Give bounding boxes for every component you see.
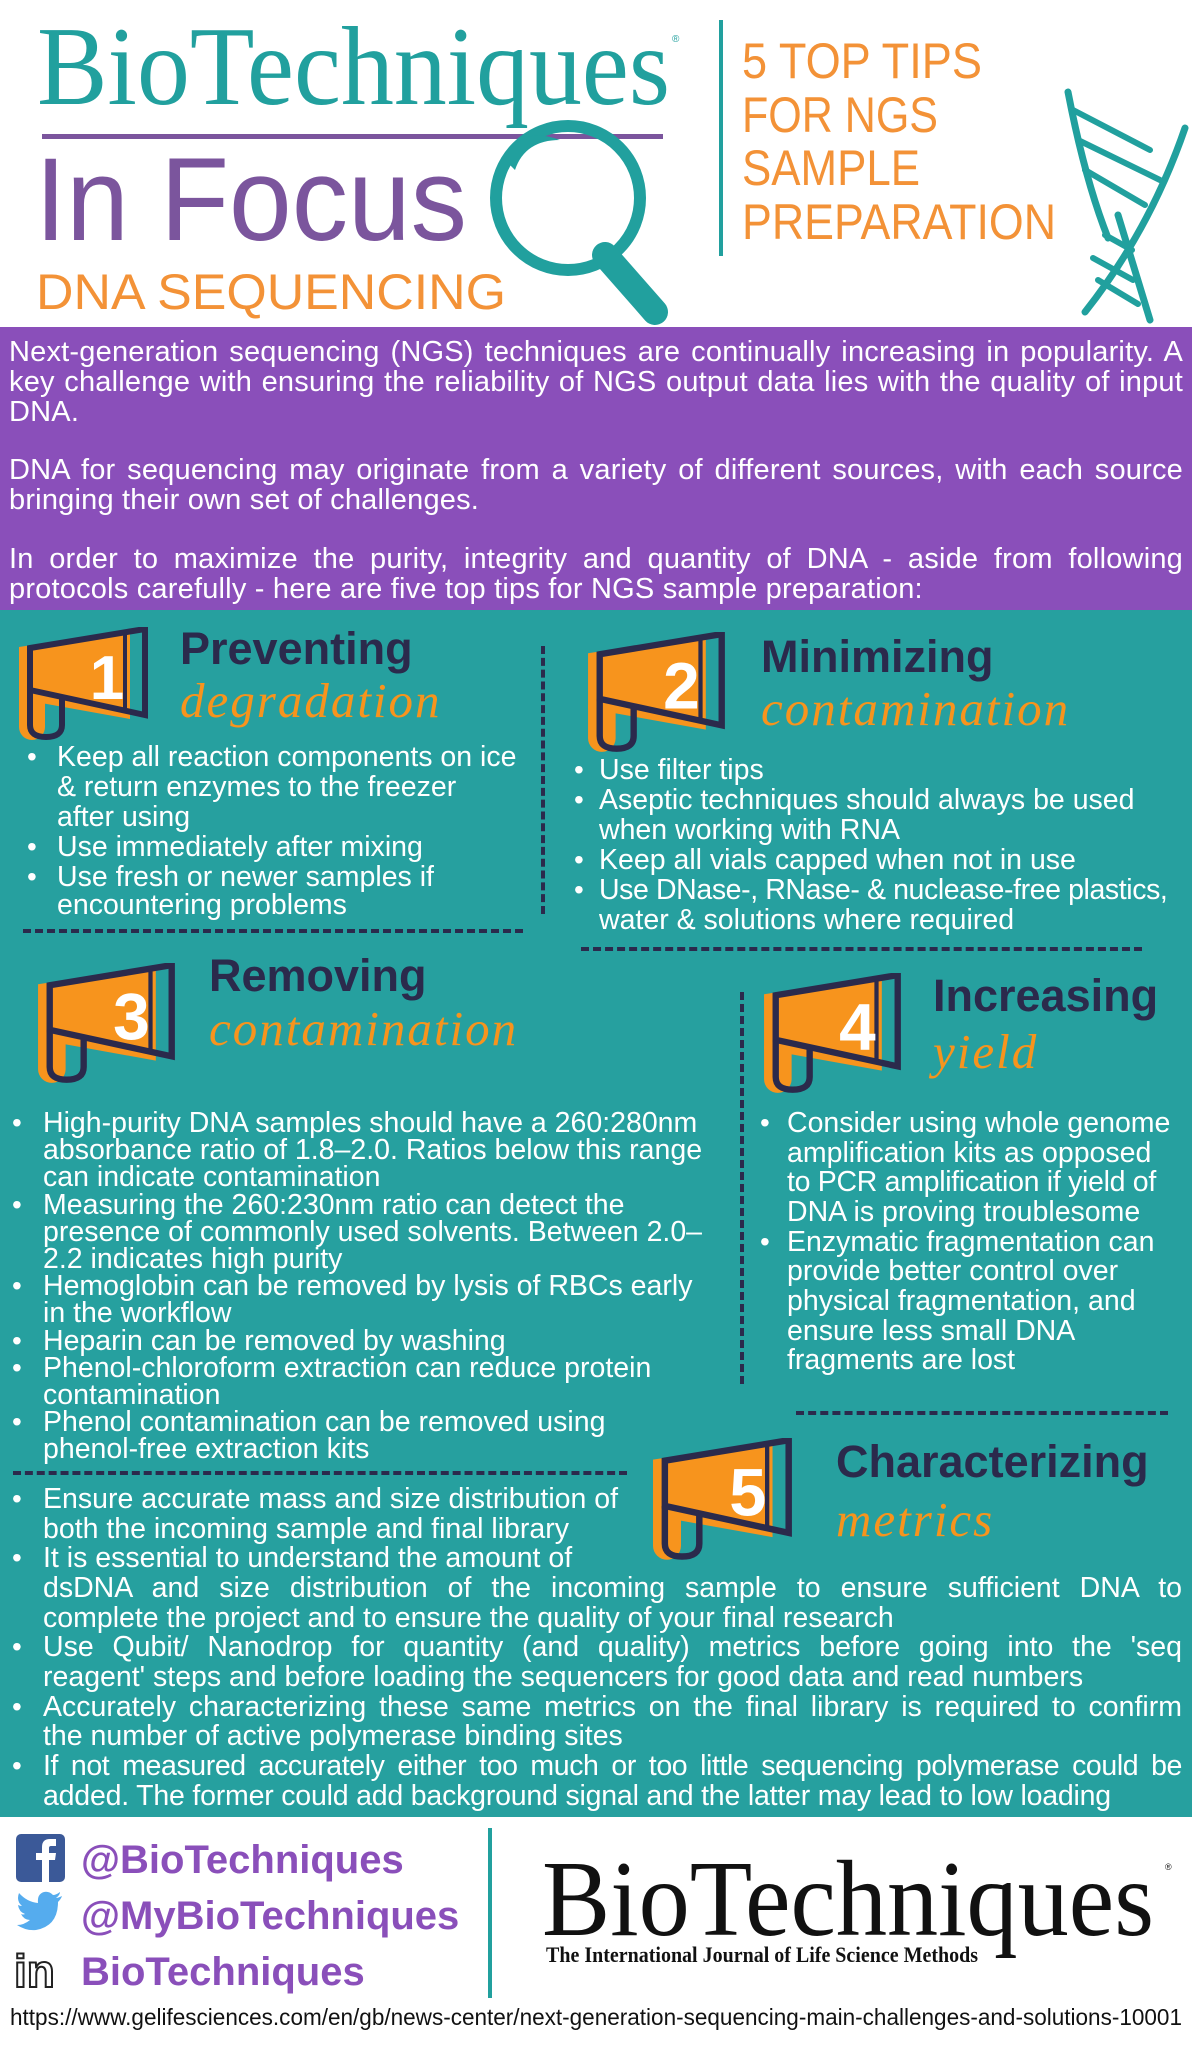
icon: DNA helix bbox=[1068, 92, 1185, 320]
heading: Removing contamination: Removing bbox=[209, 950, 427, 1001]
subtitle: DNA SEQUENCING: DNA SEQUENCING bbox=[36, 264, 506, 320]
title: BioTechniques: ® bbox=[672, 34, 680, 45]
icon: linkedin: in bbox=[14, 1945, 55, 1997]
icon: megaphone 5: 5 bbox=[729, 1457, 766, 1531]
list: tip 4 bullets: ensure less small DNA bbox=[787, 1315, 1075, 1347]
list: tip 2 bullets: water & solutions where required bbox=[599, 904, 1014, 936]
panel: introduction: DNA. bbox=[9, 396, 79, 428]
list: tip 2 bullets: • bbox=[574, 844, 584, 875]
list: tip 5 bullets: • bbox=[12, 1542, 22, 1573]
list: tip 3 bullets bbox=[12, 1107, 702, 1465]
list: tip 2 bullets: Aseptic techniques should always be used bbox=[599, 784, 1135, 816]
heading: 5 top tips: PREPARATION bbox=[742, 194, 1056, 250]
heading: Preventing degradation: Preventing bbox=[180, 623, 413, 674]
icon: megaphone 1: 1 bbox=[90, 644, 124, 713]
list: tip 5 bullets: • bbox=[12, 1483, 22, 1514]
list: tip 5 bullets: Ensure accurate mass and size distribution of bbox=[43, 1483, 618, 1515]
list: tip 3 bullets: phenol-free extraction kits bbox=[43, 1433, 369, 1465]
list: tip 4 bullets: Enzymatic fragmentation can bbox=[787, 1226, 1155, 1258]
footer: social links bbox=[14, 1834, 459, 1997]
footer: BioTechniques logo: ® bbox=[1165, 1862, 1172, 1872]
list: tip 5 bullets bbox=[12, 1483, 1182, 1812]
title: BioTechniques: BioTechniques bbox=[37, 5, 670, 129]
list: tip 2 bullets: Use DNase-, RNase- & nuclease-free plastics, bbox=[599, 874, 1167, 906]
list: tip 2 bullets: when working with RNA bbox=[599, 814, 900, 846]
list: tip 3 bullets: Measuring the 260:230nm ratio can detect the bbox=[43, 1189, 624, 1221]
icon: twitter bbox=[17, 1892, 62, 1930]
heading: Removing contamination bbox=[209, 950, 518, 1056]
panel: introduction: key challenge with ensuring the reliability of NGS output data lies with the quality of input bbox=[9, 366, 1183, 398]
list: tip 5 bullets: dsDNA and size distribution of the incoming sample to ensure sufficient DNA to bbox=[43, 1572, 1182, 1604]
panel: introduction: Next-generation sequencing (NGS) techniques are continually increasing in popularity. A bbox=[9, 336, 1183, 368]
heading: Characterizing metrics bbox=[836, 1436, 1149, 1547]
list: tip 1 bullets: & return enzymes to the freezer bbox=[57, 771, 456, 803]
list: tip 1 bullets: encountering problems bbox=[57, 889, 347, 921]
list: tip 3 bullets: • bbox=[12, 1406, 22, 1437]
icon: megaphone 2 bbox=[588, 632, 725, 752]
list: tip 2 bullets bbox=[574, 754, 1167, 936]
list: tip 3 bullets: • bbox=[12, 1107, 22, 1138]
panel: introduction: protocols carefully - here are five top tips for NGS sample preparation: bbox=[9, 573, 923, 605]
panel: tips bbox=[0, 610, 1192, 1817]
list: tip 3 bullets: contamination bbox=[43, 1379, 220, 1411]
list: tip 1 bullets: after using bbox=[57, 801, 190, 833]
list: tip 2 bullets: Use filter tips bbox=[599, 754, 764, 786]
footer: BioTechniques logo: BioTechniques bbox=[542, 1840, 1154, 1959]
heading: Characterizing metrics: metrics bbox=[836, 1492, 994, 1547]
list: tip 5 bullets: Use Qubit/ Nanodrop for quantity (and quality) metrics before going into the 'seq bbox=[43, 1631, 1182, 1663]
panel: tip 5 bbox=[12, 1436, 1182, 1812]
heading: 5 top tips: SAMPLE bbox=[742, 140, 920, 196]
footer: BioTechniques logo: The International Journal of Life Science Methods bbox=[546, 1942, 978, 1967]
heading: 5 top tips bbox=[742, 33, 1056, 250]
list: tip 3 bullets: 2.2 indicates high purity bbox=[43, 1243, 342, 1275]
heading: Minimizing contamination: Minimizing bbox=[761, 631, 993, 682]
icon: megaphone 5 bbox=[653, 1438, 792, 1560]
footer: social links: @MyBioTechniques bbox=[81, 1894, 459, 1938]
icon: megaphone 4: 4 bbox=[839, 989, 876, 1063]
icon: megaphone 4 bbox=[764, 973, 901, 1093]
list: tip 1 bullets: • bbox=[27, 741, 37, 772]
list: tip 5 bullets: • bbox=[12, 1691, 22, 1722]
list: tip 5 bullets: both the incoming sample and final library bbox=[43, 1513, 569, 1545]
heading: Characterizing metrics: Characterizing bbox=[836, 1436, 1149, 1487]
list: tip 3 bullets: • bbox=[12, 1270, 22, 1301]
heading: Preventing degradation bbox=[180, 623, 442, 728]
icon: megaphone 3 bbox=[38, 963, 175, 1083]
list: tip 3 bullets: Phenol-chloroform extraction can reduce protein bbox=[43, 1352, 651, 1384]
icon: megaphone 1 bbox=[19, 627, 148, 740]
heading: Removing contamination: contamination bbox=[209, 1001, 518, 1056]
list: tip 3 bullets: Hemoglobin can be removed by lysis of RBCs early bbox=[43, 1270, 692, 1302]
list: tip 5 bullets: the number of active polymerase binding sites bbox=[43, 1720, 623, 1752]
panel: tip 1 bbox=[19, 623, 516, 921]
list: tip 5 bullets: It is essential to understand the amount of bbox=[43, 1542, 572, 1574]
footer: social links: @BioTechniques bbox=[81, 1838, 404, 1882]
heading: 5 top tips: 5 TOP TIPS bbox=[742, 33, 982, 89]
list: tip 3 bullets: can indicate contamination bbox=[43, 1161, 380, 1193]
list: tip 1 bullets bbox=[27, 741, 516, 921]
list: tip 1 bullets: • bbox=[27, 831, 37, 862]
panel: introduction bbox=[0, 327, 1192, 610]
list: tip 4 bullets: DNA is proving troublesome bbox=[787, 1196, 1140, 1228]
footer: social links: BioTechniques bbox=[81, 1950, 365, 1994]
list: tip 1 bullets: Use fresh or newer samples if bbox=[57, 861, 434, 893]
list: tip 3 bullets: absorbance ratio of 1.8–2.0. Ratios below this range bbox=[43, 1134, 702, 1166]
panel: introduction: bringing their own set of challenges. bbox=[9, 484, 479, 516]
heading: 5 top tips: FOR NGS bbox=[742, 87, 938, 143]
list: tip 4 bullets: to PCR amplification if yield of bbox=[787, 1166, 1156, 1198]
panel: introduction: In order to maximize the purity, integrity and quantity of DNA - aside from following bbox=[9, 543, 1183, 575]
list: tip 5 bullets: • bbox=[12, 1750, 22, 1781]
panel: tip 3 bbox=[12, 950, 702, 1465]
panel: tip 2 bbox=[574, 631, 1167, 936]
list: tip 4 bullets: fragments are lost bbox=[787, 1344, 1015, 1376]
list: tip 4 bullets: amplification kits as opposed bbox=[787, 1137, 1151, 1169]
list: tip 2 bullets: • bbox=[574, 754, 584, 785]
list: tip 3 bullets: • bbox=[12, 1352, 22, 1383]
list: tip 5 bullets: added. The former could add background signal and the latter may lead to low loading bbox=[43, 1780, 1111, 1812]
list: tip 5 bullets: complete the project and to ensure the quality of your final research bbox=[43, 1602, 894, 1634]
list: tip 4 bullets: Consider using whole genome bbox=[787, 1107, 1170, 1139]
panel: tip 4 bbox=[760, 970, 1170, 1376]
heading: Preventing degradation: degradation bbox=[180, 673, 442, 728]
list: tip 3 bullets: Heparin can be removed by washing bbox=[43, 1325, 506, 1357]
list: tip 4 bullets bbox=[760, 1107, 1170, 1376]
list: tip 1 bullets: Use immediately after mixing bbox=[57, 831, 423, 863]
list: tip 4 bullets: physical fragmentation, and bbox=[787, 1285, 1136, 1317]
list: tip 3 bullets: presence of commonly used solvents. Between 2.0– bbox=[43, 1216, 702, 1248]
list: tip 3 bullets: • bbox=[12, 1325, 22, 1356]
icon: magnifying glass bbox=[496, 126, 655, 312]
list: tip 4 bullets: • bbox=[760, 1107, 770, 1138]
heading: Increasing yield bbox=[928, 970, 1158, 1079]
list: tip 3 bullets: Phenol contamination can be removed using bbox=[43, 1406, 605, 1438]
list: tip 2 bullets: • bbox=[574, 874, 584, 905]
heading: Increasing yield: yield bbox=[933, 1024, 1038, 1079]
list: tip 5 bullets: reagent' steps and before loading the sequencers for good data and read numbers bbox=[43, 1661, 1083, 1693]
title: In Focus: In Focus bbox=[35, 134, 467, 266]
list: tip 4 bullets: provide better control over bbox=[787, 1255, 1118, 1287]
heading: Minimizing contamination bbox=[761, 631, 1070, 736]
list: tip 5 bullets: If not measured accurately either too much or too little sequencing polymerase could be bbox=[43, 1750, 1182, 1782]
icon: facebook bbox=[16, 1834, 65, 1882]
list: tip 3 bullets: • bbox=[12, 1189, 22, 1220]
footer: source URL: https://www.gelifesciences.com/en/gb/news-center/next-generation-sequencing-main-challenges-and-solutions-10001 bbox=[10, 2004, 1182, 2030]
heading: Minimizing contamination: contamination bbox=[761, 681, 1070, 736]
icon: megaphone 3: 3 bbox=[113, 979, 150, 1053]
list: tip 5 bullets: • bbox=[12, 1631, 22, 1662]
list: tip 3 bullets: High-purity DNA samples should have a 260:280nm bbox=[43, 1107, 697, 1139]
list: tip 2 bullets: Keep all vials capped when not in use bbox=[599, 844, 1076, 876]
list: tip 4 bullets: • bbox=[760, 1226, 770, 1257]
list: tip 3 bullets: in the workflow bbox=[43, 1297, 232, 1329]
panel: introduction: DNA for sequencing may originate from a variety of different sources, with each source bbox=[9, 454, 1183, 486]
list: tip 1 bullets: • bbox=[27, 861, 37, 892]
list: tip 2 bullets: • bbox=[574, 784, 584, 815]
list: tip 1 bullets: Keep all reaction components on ice bbox=[57, 741, 516, 773]
list: tip 5 bullets: Accurately characterizing these same metrics on the final library is required to confirm bbox=[43, 1691, 1182, 1723]
header bbox=[35, 5, 1188, 325]
icon: megaphone 2: 2 bbox=[663, 648, 700, 722]
heading: Increasing yield: Increasing bbox=[933, 970, 1158, 1021]
